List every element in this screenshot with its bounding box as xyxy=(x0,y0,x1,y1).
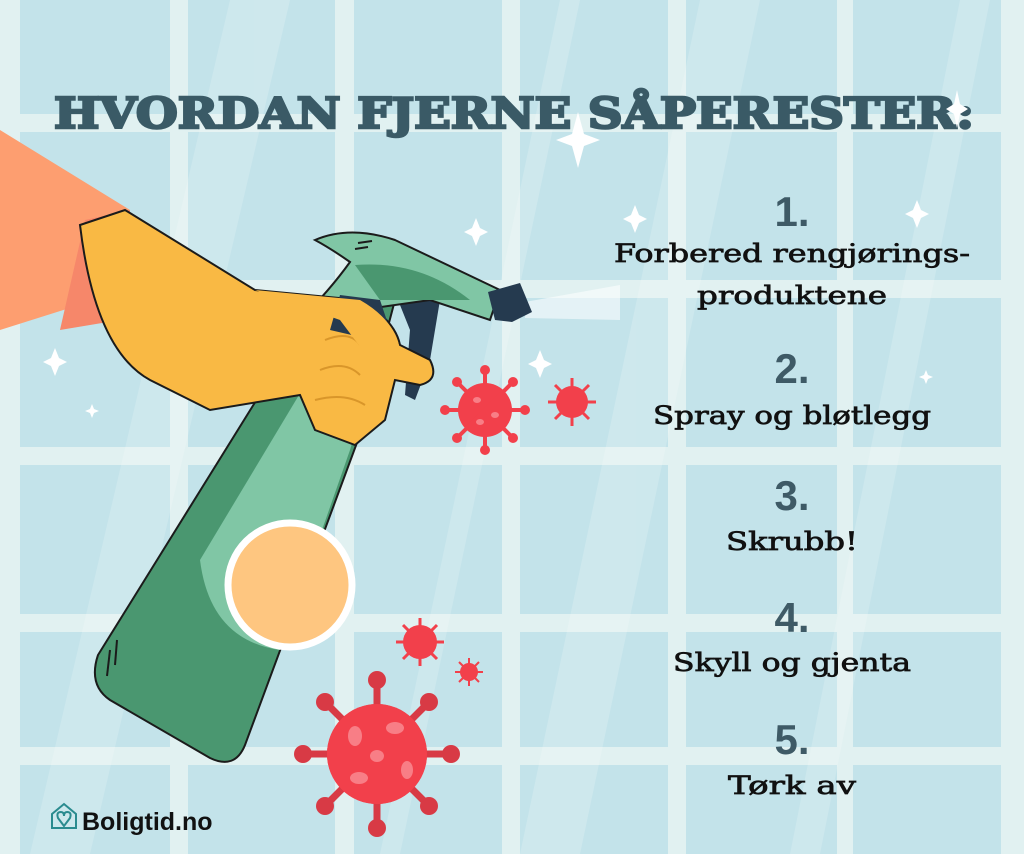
step 3: Skrubb! xyxy=(726,527,858,556)
label xyxy=(228,523,352,647)
steps list xyxy=(614,188,970,800)
step 1 xyxy=(614,188,970,310)
step 2: 2. xyxy=(774,345,810,392)
step 1: Forbered rengjørings- xyxy=(614,239,970,268)
title: HVORDAN FJERNE SÅPERESTER: xyxy=(54,88,974,138)
step 5: 5. xyxy=(774,716,810,763)
glove xyxy=(80,210,433,445)
nozzle xyxy=(488,283,532,322)
step 5: Tørk av xyxy=(728,771,857,800)
spray mist xyxy=(525,285,620,320)
step 1: produktene xyxy=(697,281,887,310)
step 3: 3. xyxy=(774,472,810,519)
step 1: 1. xyxy=(774,188,810,235)
step 4 xyxy=(673,594,911,677)
step 2 xyxy=(653,345,931,430)
viruses xyxy=(294,365,596,837)
step 4: 4. xyxy=(774,594,810,641)
bottle body xyxy=(95,300,395,762)
step 2: Spray og bløtlegg xyxy=(653,401,931,430)
arm xyxy=(0,130,130,330)
illustration: arm, glove and spray bottle xyxy=(0,130,620,762)
step 3 xyxy=(726,472,858,556)
logo: Boligtid.no xyxy=(82,808,213,836)
sparkles xyxy=(43,90,968,418)
step 5 xyxy=(728,716,857,800)
trigger xyxy=(398,300,440,400)
head xyxy=(300,232,500,330)
step 4: Skyll og gjenta xyxy=(673,648,911,677)
